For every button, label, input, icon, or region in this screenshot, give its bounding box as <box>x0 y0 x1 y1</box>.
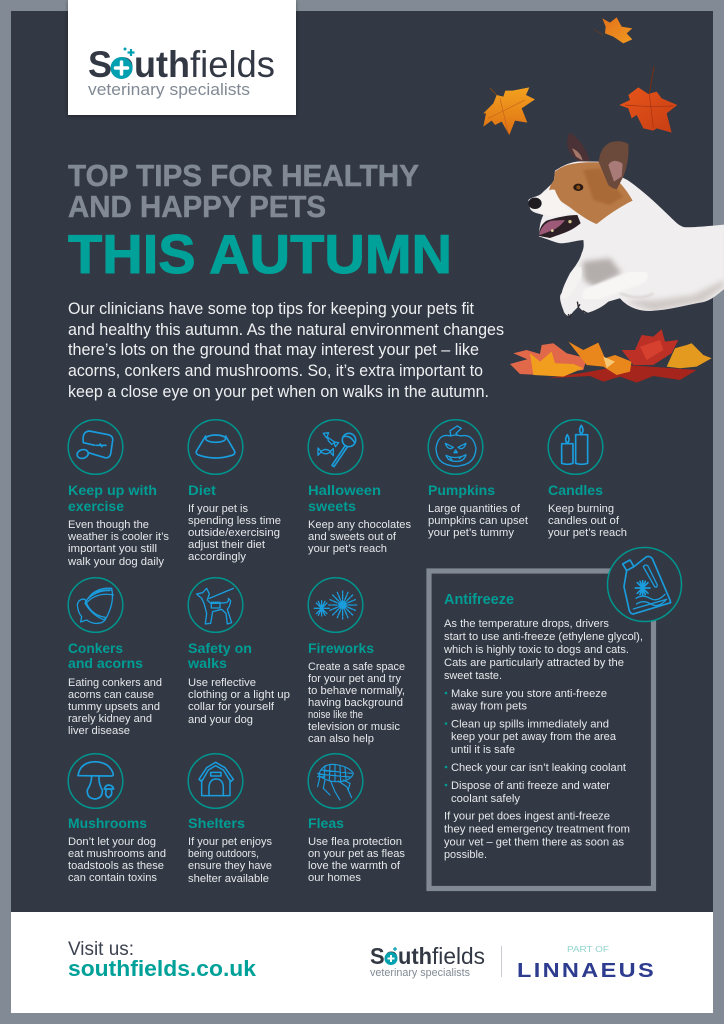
title: AND HAPPY PETS <box>68 189 326 224</box>
icon: dog on lead <box>197 588 233 624</box>
footer: Linnaeus logo: PART OF <box>567 944 609 954</box>
tip: Conkers and acorns: Conkers <box>68 641 123 656</box>
footer: Southfields logo: veterinary specialists <box>370 967 470 979</box>
tip: Halloween sweets: Keep any chocolates <box>308 519 411 531</box>
tip: Safety on walks: clothing or a light up <box>188 689 290 701</box>
bullet list: until it is safe <box>451 744 515 756</box>
panel: Antifreeze: possible. <box>444 849 487 861</box>
tip: Mushrooms: Don’t let your dog <box>68 836 156 848</box>
tip: Keep up with exercise: exercise <box>68 499 124 514</box>
tip: Keep up with exercise: walk your dog daily <box>67 556 165 568</box>
bullet list: away from pets <box>451 700 527 712</box>
tip: Fireworks: television or music <box>308 721 401 733</box>
panel: Antifreeze: Cats are particularly attracted by the <box>444 657 624 669</box>
footer: Linnaeus logo <box>517 944 656 982</box>
dog right ear <box>599 141 629 189</box>
footer: Southfields logo: South <box>370 943 432 969</box>
title <box>68 158 452 285</box>
title: TOP TIPS FOR HEALTHY <box>68 158 419 193</box>
tip: Diet <box>188 420 281 563</box>
footer: Southfields logo <box>370 943 485 979</box>
dog mouth <box>539 215 581 238</box>
leaf pile <box>510 329 712 383</box>
icon: candles <box>562 425 588 464</box>
tip: Shelters: being outdoors, <box>188 848 259 860</box>
intro text <box>68 300 504 401</box>
icon: antifreeze container <box>608 548 682 622</box>
footer: divider <box>501 946 502 977</box>
icon: pumpkin <box>436 426 476 466</box>
leaf: top small <box>594 17 632 43</box>
panel: Antifreeze <box>429 548 682 888</box>
dog left ear <box>567 133 591 163</box>
tip: Keep up with exercise: important you still <box>68 543 157 555</box>
footer: visit us: Visit us: <box>68 939 134 960</box>
leaf: left orange <box>483 87 535 135</box>
tip: Conkers and acorns: tummy upsets and <box>68 701 160 713</box>
panel: Antifreeze: your vet – get them there as soon as <box>444 836 624 848</box>
tip: Fireworks: can also help <box>308 733 374 745</box>
icon: bowl <box>196 435 235 458</box>
tip: Shelters: If your pet enjoys <box>188 836 272 848</box>
tip: Fireworks: Fireworks <box>308 641 374 656</box>
tip: Pumpkins: Pumpkins <box>428 483 495 498</box>
icon: dog house <box>199 762 233 796</box>
tip: Keep up with exercise: Keep up with <box>68 483 157 498</box>
bullet list: coolant safely <box>451 793 521 805</box>
footer: visit us: southfields.co.uk <box>68 956 257 981</box>
bullet list <box>445 688 626 805</box>
tip: Shelters: ensure they have <box>188 860 272 872</box>
tip: Shelters: Shelters <box>188 816 245 831</box>
tip: Halloween sweets: sweets <box>308 499 356 514</box>
tip: Keep up with exercise <box>67 420 169 568</box>
tip: Diet: accordingly <box>188 551 247 563</box>
tip: Fleas: love the warmth of <box>308 860 400 872</box>
tip: Safety on walks: Safety on <box>188 641 252 656</box>
tip: Fleas: Fleas <box>308 816 344 831</box>
tip: Diet: adjust their diet <box>188 539 265 551</box>
dog eye <box>573 184 583 191</box>
tip: Conkers and acorns: Eating conkers and <box>68 677 162 689</box>
tip: Pumpkins: pumpkins can upset <box>428 515 528 527</box>
tip: Pumpkins <box>428 420 528 539</box>
logo: Southfields header: fields <box>190 44 275 85</box>
dog shading <box>532 162 724 312</box>
tip: Fireworks: noise like the <box>308 709 363 721</box>
tip: Conkers and acorns: rarely kidney and <box>68 713 152 725</box>
tip: Mushrooms <box>68 754 166 884</box>
tip: Diet: If your pet is <box>188 503 248 515</box>
tip: Diet: outside/exercising <box>188 527 280 539</box>
tip: Fleas <box>308 754 405 884</box>
panel: Antifreeze: As the temperature drops, drivers <box>444 618 609 630</box>
tip: Keep up with exercise: weather is cooler it’s <box>67 531 169 543</box>
tip: Safety on walks: walks <box>187 656 227 671</box>
footer: Southfields logo: fields <box>432 943 485 969</box>
tip: Safety on walks: collar for yourself <box>188 701 274 713</box>
icon: lead <box>76 431 113 460</box>
dog nose <box>528 198 542 209</box>
tip: Pumpkins: Large quantities of <box>428 503 520 515</box>
tip: Conkers and acorns: acorns can cause <box>68 689 154 701</box>
tip: Halloween sweets: and sweets out of <box>308 531 396 543</box>
tip: Mushrooms: can contain toxins <box>68 872 157 884</box>
tip: Fireworks: for your pet and try <box>308 673 402 685</box>
dog body <box>528 161 724 317</box>
footer: visit us <box>68 939 257 981</box>
logo: Southfields header: South <box>88 44 190 85</box>
tip: Conkers and acorns <box>68 578 162 737</box>
tip: Fleas: on your pet as fleas <box>308 848 405 860</box>
tip: Diet: spending less time <box>188 515 281 527</box>
tip: Mushrooms: eat mushrooms and <box>68 848 166 860</box>
bullet list: keep your pet away from the area <box>451 731 616 743</box>
panel: Antifreeze: Antifreeze <box>444 592 514 608</box>
leaf: right red <box>619 67 677 133</box>
tip: Candles: candles out of <box>548 515 619 527</box>
logo: Southfields header: veterinary specialists <box>88 80 250 99</box>
bullet list: Dispose of anti freeze and water <box>451 780 610 792</box>
panel: Antifreeze: If your pet does ingest anti-freeze <box>444 810 610 822</box>
intro text: acorns, conkers and mushrooms. So, it’s extra important to <box>68 362 483 380</box>
tip: Keep up with exercise: Even though the <box>68 519 149 531</box>
tip: Fireworks: having background <box>308 697 403 709</box>
tip: Conkers and acorns: liver disease <box>68 725 130 737</box>
icon: sweets and lollipop <box>318 433 356 467</box>
tip: Fireworks: Create a safe space <box>308 661 405 673</box>
panel: Antifreeze: start to use anti-freeze (ethylene glycol), <box>444 631 643 643</box>
tip: Fleas: Use flea protection <box>308 836 402 848</box>
tip: Conkers and acorns: and acorns <box>68 656 143 671</box>
bullet list: Clean up spills immediately and <box>451 718 609 730</box>
tip: Fireworks: to behave normally, <box>308 685 405 697</box>
icon: mushroom <box>78 762 114 799</box>
dog claws <box>568 302 587 317</box>
icon: flea <box>318 764 353 800</box>
title: THIS AUTUMN <box>68 223 452 285</box>
footer panel <box>11 912 713 1013</box>
intro text: there’s lots on the ground that may interest your pet – like <box>68 341 479 359</box>
tip: Candles: your pet’s reach <box>548 527 627 539</box>
tip: Shelters <box>188 754 272 885</box>
intro text: keep a close eye on your pet when on walks in the autumn. <box>68 383 489 401</box>
tip: Halloween sweets: Halloween <box>308 483 381 498</box>
tip: Candles: Candles <box>548 483 603 498</box>
tip: Safety on walks: and your dog <box>188 714 253 726</box>
footer: Linnaeus logo: LINNAEUS <box>517 960 656 982</box>
bullet list: Check your car isn’t leaking coolant <box>451 762 626 774</box>
tip: Fleas: our homes <box>308 872 361 884</box>
tip: Shelters: shelter available <box>188 873 269 885</box>
bullet list: Make sure you store anti-freeze <box>451 688 607 700</box>
icon: fireworks <box>314 591 357 619</box>
tip: Safety on walks: Use reflective <box>188 677 256 689</box>
tip: Halloween sweets: your pet’s reach <box>308 543 387 555</box>
tip: Candles <box>548 420 627 539</box>
intro text: and healthy this autumn. As the natural environment changes <box>68 321 504 339</box>
tip: Diet: Diet <box>188 483 217 498</box>
tip: Safety on walks <box>187 578 290 726</box>
logo: Southfields header <box>68 0 296 115</box>
panel: Antifreeze: sweet taste. <box>444 670 502 682</box>
tip: Mushrooms: toadstools as these <box>68 860 164 872</box>
tip: Pumpkins: your pet’s tummy <box>428 527 515 539</box>
dog photo illustration <box>528 133 724 317</box>
intro text: Our clinicians have some top tips for keeping your pets fit <box>68 300 474 318</box>
tip: Candles: Keep burning <box>548 503 614 515</box>
tip: Fireworks <box>308 578 405 745</box>
icon: acorn <box>77 588 113 623</box>
tip: Halloween sweets <box>308 420 411 555</box>
dog brown face patch <box>548 162 633 224</box>
panel: Antifreeze: they need emergency treatment from <box>444 824 630 836</box>
panel: Antifreeze: which is highly toxic to dogs and cats. <box>443 644 629 656</box>
tip: Mushrooms: Mushrooms <box>68 816 147 831</box>
